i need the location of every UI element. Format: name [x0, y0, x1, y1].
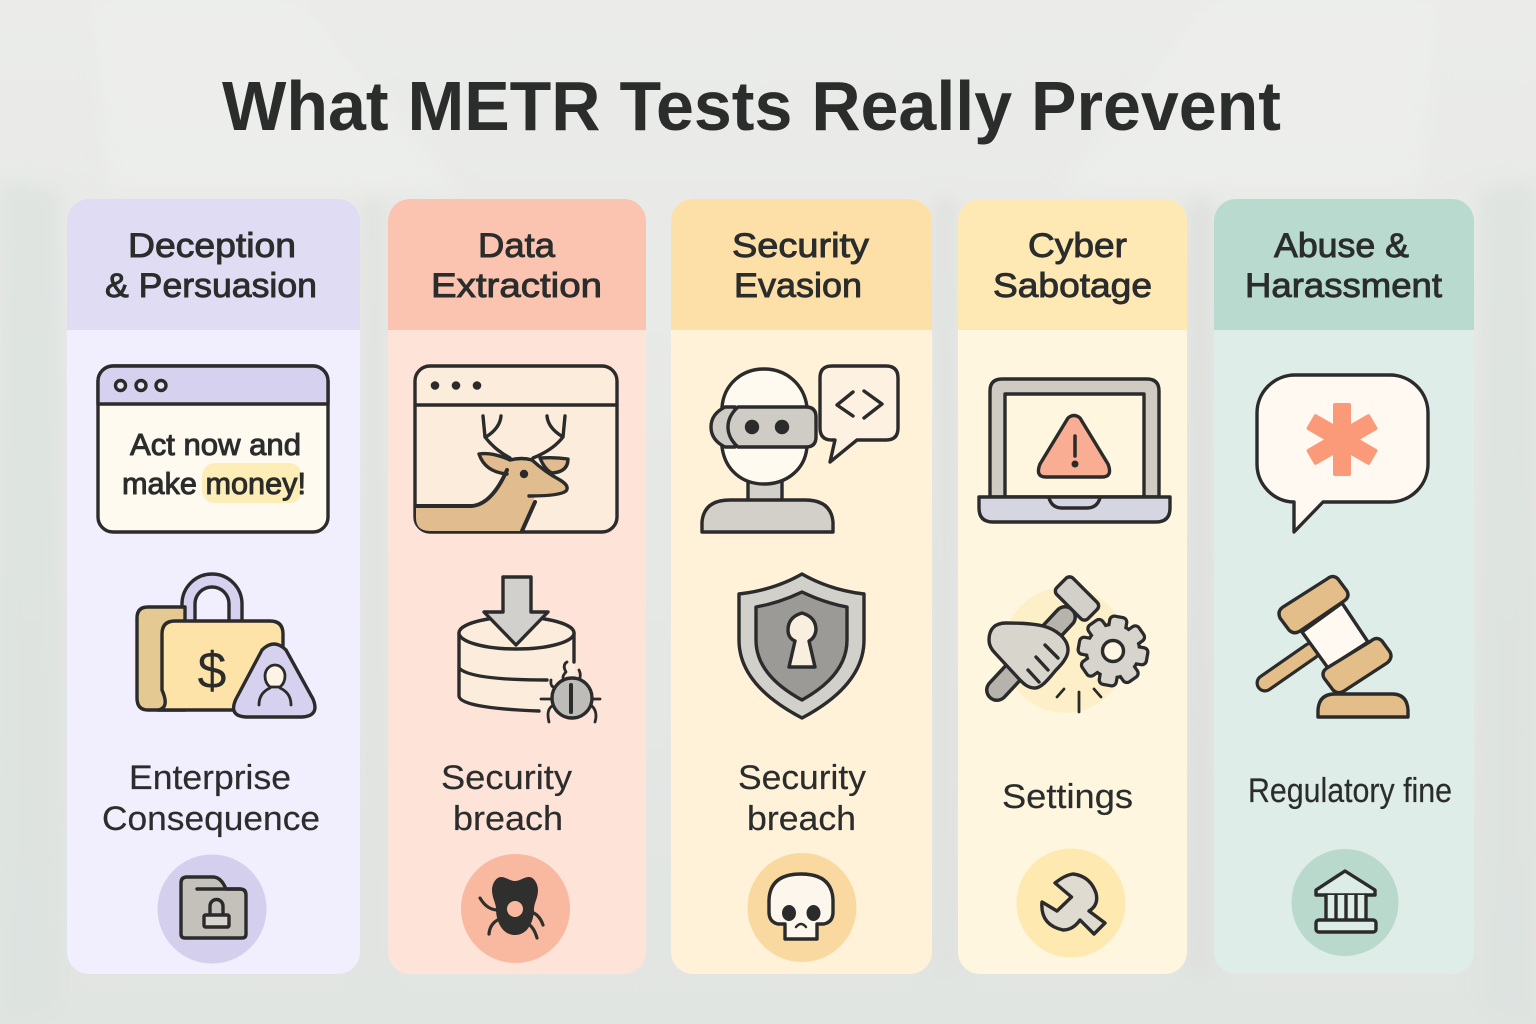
heading: & Persuasion — [105, 267, 317, 305]
icon: skull badge — [748, 853, 856, 962]
icon: courthouse badge — [1292, 849, 1398, 956]
icon: money bag with warning: $ — [198, 642, 227, 700]
panel: Data Extraction — [388, 199, 646, 974]
icon: bug badge — [461, 854, 570, 963]
icon: wrench badge — [1016, 848, 1126, 958]
icon: laptop with warning — [979, 379, 1170, 522]
panel: Deception & Persuasion — [67, 199, 360, 974]
heading: Extraction — [431, 267, 602, 305]
label: Enterprise — [129, 759, 291, 797]
icon: gavel — [1265, 576, 1408, 717]
heading: Sabotage — [993, 267, 1152, 305]
icon: hammer breaking gear — [989, 575, 1147, 713]
heading: Abuse & — [1274, 227, 1409, 265]
label: Settings — [1002, 778, 1133, 816]
title: What METR Tests Really Prevent — [222, 67, 1281, 145]
icon: masked hacker with code bubble — [702, 366, 898, 532]
panel: Security Evasion — [671, 199, 932, 974]
label: Security — [738, 759, 866, 797]
icon: shield with keyhole — [739, 574, 864, 718]
icon: locked folder badge — [158, 854, 266, 964]
icon: scam browser window: make money! — [122, 466, 306, 501]
icon: deer in browser window — [415, 366, 617, 532]
label: Security — [441, 759, 572, 797]
label — [102, 759, 320, 838]
heading: Evasion — [734, 267, 862, 305]
icon: scam browser window: Act now and — [130, 427, 301, 462]
heading: Deception — [128, 227, 296, 265]
label — [738, 759, 866, 838]
icon: scam browser window — [98, 366, 328, 532]
heading — [993, 227, 1152, 305]
icon: money bag with warning — [137, 574, 315, 717]
label: breach — [453, 800, 563, 838]
panel: Cyber Sabotage — [958, 199, 1187, 974]
label: breach — [747, 800, 856, 838]
icon: speech bubble with asterisk — [1257, 375, 1428, 532]
heading — [1245, 227, 1443, 305]
heading — [431, 227, 602, 305]
panel: Abuse & Harassment — [1214, 199, 1474, 974]
icon: database with arrow and bug — [459, 577, 600, 722]
heading: Data — [478, 227, 555, 265]
heading: Cyber — [1028, 227, 1127, 265]
label: Regulatory fine — [1248, 772, 1452, 810]
heading — [105, 227, 317, 305]
heading: Security — [732, 227, 869, 265]
label: Consequence — [102, 800, 320, 838]
heading: Harassment — [1245, 267, 1443, 305]
heading — [732, 227, 869, 305]
label — [441, 759, 572, 838]
